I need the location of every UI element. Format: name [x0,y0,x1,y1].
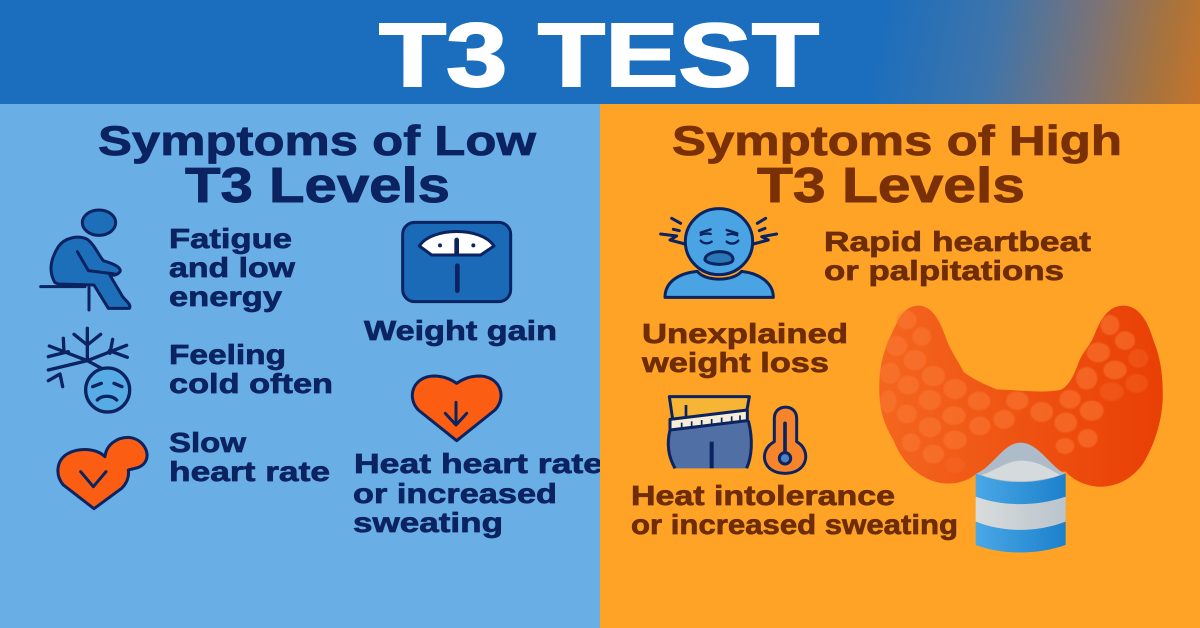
text: slow heart rate: heart rate [169,456,330,487]
heading: high T3: T3 Levels [757,159,1025,213]
icon: snowflake and sad face [48,328,130,412]
text: heat heart rate [353,448,603,538]
text: feeling cold: Feeling [169,339,286,370]
text: fatigue: Fatigue [169,223,292,254]
heading: high T3: Symptoms of High [672,117,1122,164]
text: weight gain: Weight gain [364,315,557,346]
text: feeling cold [169,339,333,399]
icon: weighing scale [403,222,511,302]
heading: low T3: Symptoms of Low [98,117,536,164]
text: heat heart rate: or increased [353,478,557,509]
icon: person with palpitations [661,209,777,297]
text: rapid heartbeat [824,226,1091,286]
text: fatigue: and low [169,252,295,283]
title: T3 TEST [379,6,819,106]
icon: slow heart rate heart [58,437,147,509]
icon: tired seated person [41,210,130,310]
icon: thermometer [764,407,806,473]
text: heat intolerance [631,480,958,540]
text: rapid heartbeat: Rapid heartbeat [824,226,1091,257]
text: unexplained weight loss: Unexplained [642,318,848,349]
text: slow heart rate: Slow [169,427,246,458]
heading: low T3 [98,117,536,213]
text: fatigue: energy [169,281,283,312]
text: feeling cold: cold often [169,368,333,399]
heading: high T3 [672,117,1122,213]
text: heat heart rate: Heat heart rate [354,448,603,479]
title banner [0,0,1200,106]
icon: heart with down arrow [412,376,501,441]
text: heat heart rate: sweating [353,507,503,538]
icon: waist with measuring tape [668,397,751,468]
illustration: lab cylinder [976,443,1066,552]
illustration: thyroid gland [879,306,1163,487]
text: rapid heartbeat: or palpitations [824,255,1064,286]
text: fatigue [169,223,295,312]
heading: low T3: T3 Levels [185,159,450,213]
panel: symptoms of high T3 [600,104,1200,628]
text: slow heart rate [169,427,330,487]
text: unexplained weight loss [641,318,848,378]
text: heat intolerance: Heat intolerance [631,480,895,511]
panel: symptoms of low T3 [0,104,603,628]
text: unexplained weight loss: weight loss [641,347,829,378]
text: heat intolerance: or increased sweating [631,509,958,540]
